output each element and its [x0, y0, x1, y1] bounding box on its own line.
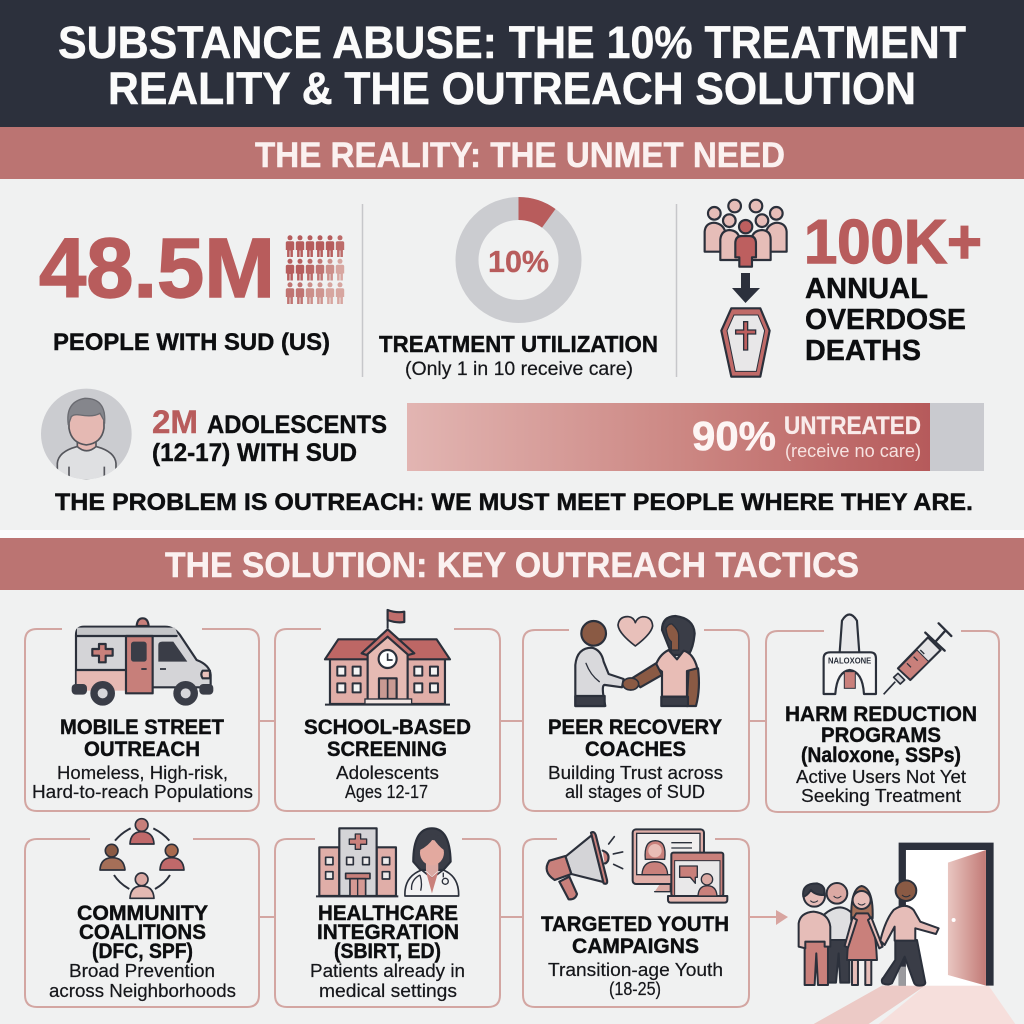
panel: mobile street outreach: Homeless, High-risk, — [57, 763, 228, 783]
person: grey shirt — [824, 883, 855, 983]
panel: targeted youth campaigns — [523, 829, 749, 1007]
stat: 2M adolescents — [152, 404, 387, 467]
callout: the problem is outreach: THE PROBLEM IS OUTREACH: WE MUST MEET PEOPLE WHERE THEY ARE. — [55, 489, 973, 516]
panel: harm reduction programs: HARM REDUCTION — [785, 703, 977, 726]
panel: healthcare integration — [275, 828, 500, 1007]
icon: adolescent avatar — [41, 389, 132, 480]
icon: syringe — [884, 623, 951, 694]
chart: 90% untreated bar — [407, 403, 984, 471]
stat: treatment utilization donut: (Only 1 in 10 receive care) — [405, 359, 633, 380]
stat: treatment utilization donut — [379, 197, 658, 380]
panel: peer recovery coaches — [523, 616, 749, 811]
icon: megaphone — [547, 832, 623, 899]
stat: 100K+ overdose deaths: OVERDOSE — [805, 304, 966, 336]
panel: peer recovery coaches: COACHES — [585, 738, 686, 761]
panel: school-based screening: SCHOOL-BASED — [304, 716, 471, 739]
section heading: the solution: THE SOLUTION: KEY OUTREACH TACTICS — [165, 546, 859, 585]
panel: community coalitions: COALITIONS — [79, 921, 206, 944]
stat: 2M adolescents: ADOLESCENTS — [207, 411, 387, 439]
stat: treatment utilization donut: TREATMENT UTILIZATION — [379, 331, 658, 357]
panel: community coalitions — [25, 819, 259, 1007]
arrow: down to coffin — [732, 273, 760, 303]
panel: mobile street outreach: MOBILE STREET — [60, 716, 224, 739]
chart: 90% untreated bar: 90% — [692, 413, 776, 459]
panel: harm reduction programs: Seeking Treatment — [801, 786, 961, 806]
stat: 48.5M people with SUD: 48.5M — [39, 221, 275, 315]
panel: mobile street outreach: Hard-to-reach Populations — [32, 782, 253, 802]
icon: community circle — [100, 819, 184, 898]
icon: crowd — [705, 200, 787, 267]
panel: school-based screening: Adolescents — [336, 763, 439, 783]
panel: healthcare integration: INTEGRATION — [317, 921, 459, 944]
panel: community coalitions: Broad Prevention — [69, 961, 215, 981]
person: pink shirt — [799, 883, 830, 985]
stat: 48.5M people with SUD: PEOPLE WITH SUD (US) — [53, 329, 330, 356]
chart: 10% donut — [467, 197, 570, 312]
section heading: the reality: THE REALITY: THE UNMET NEED — [255, 136, 785, 175]
panel: targeted youth campaigns: Transition-age Youth — [548, 960, 723, 980]
icon: ambulance — [72, 618, 213, 706]
icon: monitor and laptop — [633, 829, 727, 903]
stat: 48.5M people with SUD — [39, 221, 344, 356]
stat: 100K+ overdose deaths: ANNUAL — [805, 273, 928, 305]
panel: school-based screening: SCREENING — [327, 738, 447, 761]
panel: mobile street outreach — [25, 618, 259, 811]
panel: school-based screening — [275, 609, 500, 811]
icon: naloxone spray: NALOXONE — [828, 657, 872, 666]
panel: targeted youth campaigns: TARGETED YOUTH — [541, 913, 729, 936]
person: woman in dress — [845, 886, 883, 985]
stat: 100K+ overdose deaths: 100K+ — [804, 208, 982, 277]
panel: healthcare integration: Patients already in — [310, 961, 465, 981]
icon: coffin — [721, 308, 770, 377]
panel: harm reduction programs: Active Users Not Yet — [796, 767, 966, 787]
panel: harm reduction programs: (Naloxone, SSPs) — [801, 744, 961, 767]
stat: 100K+ overdose deaths: DEATHS — [805, 335, 921, 367]
panel: mobile street outreach: OUTREACH — [84, 738, 200, 761]
panel: healthcare integration: HEALTHCARE — [318, 902, 458, 925]
panel: healthcare integration: medical settings — [319, 981, 457, 1001]
section heading: the reality — [0, 127, 1024, 179]
panel: healthcare integration: (SBIRT, ED) — [334, 940, 441, 963]
title banner: REALITY & THE OUTREACH SOLUTION — [108, 63, 916, 114]
panel: targeted youth campaigns: (18-25) — [609, 979, 661, 999]
panel: peer recovery coaches: PEER RECOVERY — [548, 716, 722, 739]
panel: targeted youth campaigns: CAMPAIGNS — [572, 935, 699, 958]
arrow: toward open door — [749, 910, 788, 925]
stat: 2M adolescents: (12-17) WITH SUD — [152, 439, 357, 467]
chart: 90% untreated bar: UNTREATED — [784, 412, 921, 440]
panel: community coalitions: (DFC, SPF) — [92, 940, 193, 963]
title banner — [0, 0, 1024, 127]
panel: peer recovery coaches: Building Trust across — [548, 763, 723, 783]
icon: hospital — [316, 828, 398, 896]
stat: 2M adolescents: 2M — [152, 404, 198, 440]
panel: community coalitions: across Neighborhoods — [49, 981, 236, 1001]
stat: 100K+ overdose deaths — [705, 200, 982, 377]
panel: peer recovery coaches: all stages of SUD — [565, 782, 705, 802]
panel: school-based screening: Ages 12-17 — [345, 782, 428, 802]
panel: harm reduction programs — [766, 614, 999, 812]
icon: school — [325, 609, 450, 705]
panel: community coalitions: COMMUNITY — [77, 902, 208, 925]
chart: 10% donut: 10% — [488, 244, 549, 279]
icon: doctor — [405, 828, 459, 896]
panel: harm reduction programs: PROGRAMS — [821, 724, 941, 747]
icon: naloxone spray — [824, 614, 876, 694]
icon: people grid — [286, 235, 344, 304]
icon: people entering open door — [799, 843, 1015, 1024]
chart: 90% untreated bar: (receive no care) — [785, 441, 921, 461]
section heading: the solution — [0, 538, 1024, 590]
title banner: SUBSTANCE ABUSE: THE 10% TREATMENT — [58, 17, 966, 68]
icon: handshake with heart — [575, 616, 699, 706]
person: walking through door — [880, 880, 939, 986]
